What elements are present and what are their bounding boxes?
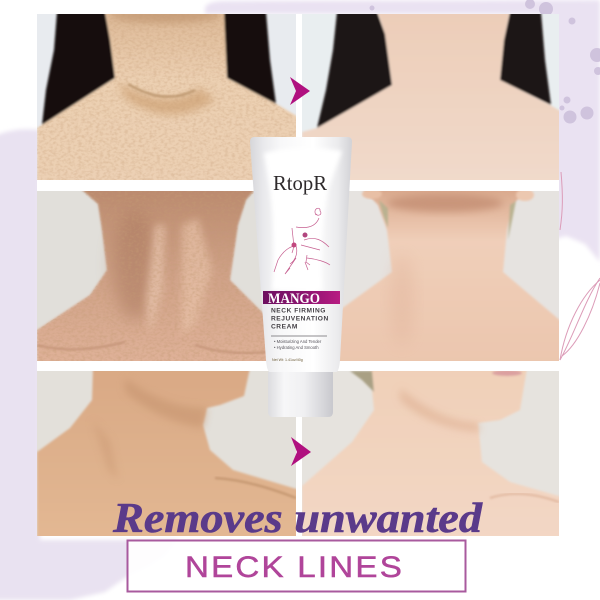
hair right (500, 12, 551, 105)
benefit list: • Moisturizing And Tender (274, 339, 322, 344)
ear right (516, 189, 534, 201)
headline: Removes unwanted (112, 496, 483, 542)
chin shadow (111, 14, 218, 26)
hair right (224, 12, 276, 104)
hair tuft (350, 371, 374, 392)
description rule (271, 336, 327, 337)
benefit list: • Hydrating And Smooth (274, 345, 319, 350)
background paint dots (370, 0, 600, 124)
collarbone (490, 494, 559, 502)
jaw shadow (125, 378, 207, 428)
tube cap (268, 372, 333, 417)
mango label: MANGO (268, 291, 320, 307)
skin (37, 10, 300, 184)
skin (37, 191, 266, 361)
leaf line decoration (560, 172, 600, 360)
photo: neck, bottom left (37, 368, 300, 540)
massage point left (292, 242, 296, 248)
under-chin shadow (387, 194, 503, 212)
tube crimp edge (264, 148, 342, 290)
benefit list (274, 339, 322, 350)
neck shadow (100, 438, 112, 468)
neck lines label: NECK LINES (185, 551, 404, 584)
net weight label: Net Wt: 1.41oz/40g (272, 358, 303, 362)
white photo separator strips (37, 180, 559, 371)
arrow: top before-after (290, 77, 310, 105)
collar creases (37, 342, 296, 353)
photo: smooth neck, middle right (340, 191, 559, 361)
wrinkle band (118, 82, 215, 115)
neck dark side (113, 210, 157, 320)
jaw shadow (400, 388, 480, 432)
product description (271, 308, 329, 330)
product description: REJUVENATION (271, 316, 329, 322)
ear left (362, 189, 382, 199)
photo: wrinkled neck, middle left (37, 191, 266, 361)
hair left (42, 12, 115, 125)
product description: CREAM (271, 324, 298, 330)
massage point right (302, 232, 308, 238)
skin (302, 10, 562, 184)
collarbone (215, 478, 296, 498)
photo: neck, bottom right (302, 368, 562, 540)
lips (492, 370, 522, 376)
white column between photos (296, 14, 302, 536)
product tube (250, 137, 352, 417)
product description: NECK FIRMING (271, 308, 326, 314)
neck lines box (128, 540, 466, 592)
neck light cords (146, 225, 165, 335)
neck crease (128, 84, 195, 97)
skin (37, 368, 300, 540)
neck line illustration (274, 208, 330, 274)
neck side shading (388, 268, 409, 322)
skin (302, 368, 562, 540)
hairline tufts (379, 200, 516, 240)
skin (340, 191, 559, 361)
wrinkle texture, middle left (37, 192, 264, 361)
hair left (317, 12, 392, 128)
photo: smooth neck, top right (302, 10, 562, 184)
tube body (250, 137, 352, 372)
arrow: bottom before-after (291, 437, 311, 466)
photo: wrinkled neck, top left (37, 7, 300, 184)
brand name: RtopR (273, 171, 327, 195)
mango band (263, 291, 340, 304)
wrinkle texture, top left (37, 14, 296, 180)
